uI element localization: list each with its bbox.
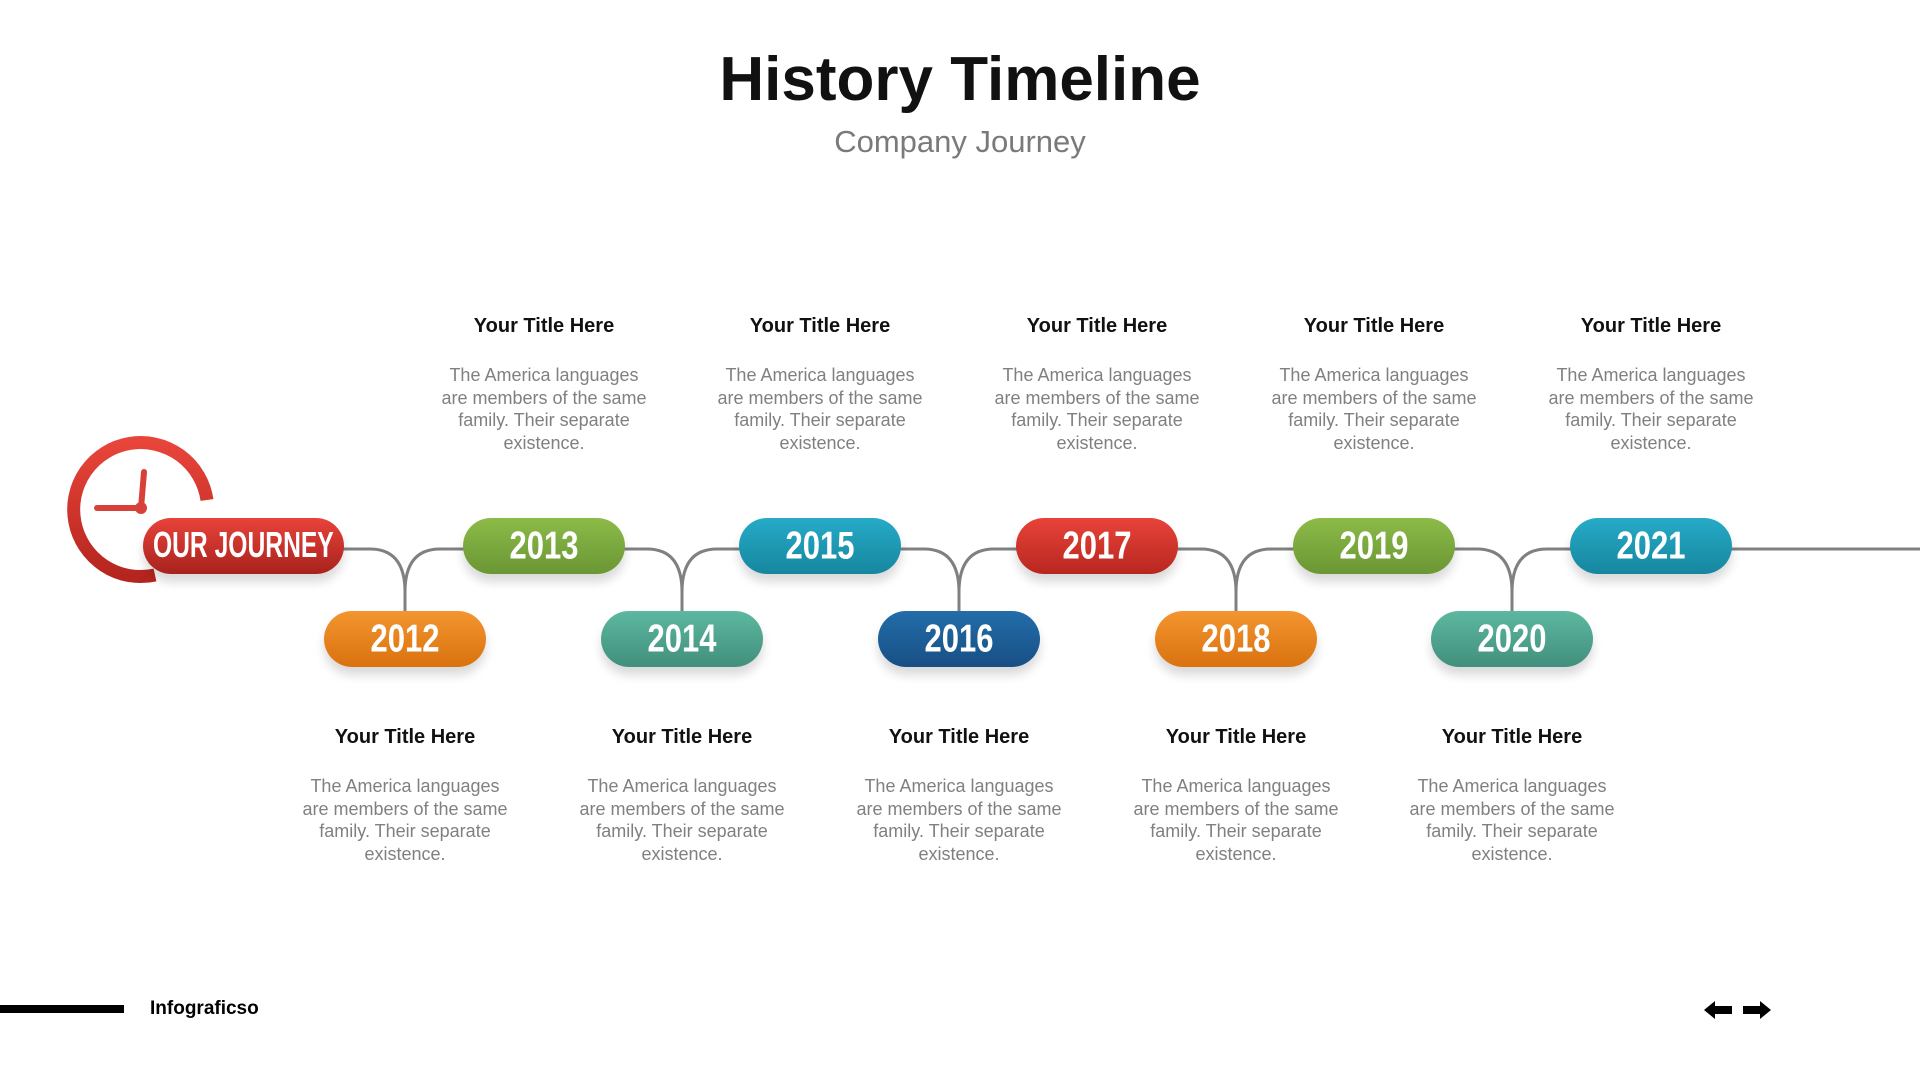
pill: 2018: 2018: [1202, 616, 1270, 660]
pill: 2012: [324, 611, 486, 667]
pill: 2019: [1293, 518, 1455, 574]
text: 2018: [1133, 726, 1339, 864]
text: 2019: Your Title Here: [1304, 315, 1444, 337]
pill: 2014: 2014: [648, 616, 716, 660]
text: 2017: Your Title Here: [1027, 315, 1167, 337]
text: 2015: Your Title Here: [750, 315, 890, 337]
text: 2021: [1548, 315, 1754, 452]
text: 2012: [302, 726, 508, 864]
icon: nav arrows: [1704, 1001, 1771, 1019]
pill: 2021: [1570, 518, 1732, 574]
text: 2017: [994, 315, 1200, 452]
text: 2018: Your Title Here: [1166, 726, 1306, 748]
pill: 2015: [739, 518, 901, 574]
text: 2015: [717, 315, 923, 452]
footer bar: [0, 1005, 124, 1013]
text: 2020: The America languages are members of the same family. Their separate existence.: [1409, 776, 1615, 864]
pill: 2018: [1155, 611, 1317, 667]
pill: 2016: 2016: [925, 616, 993, 660]
text: 2014: The America languages are members of the same family. Their separate existence.: [579, 776, 785, 864]
text: 2020: [1409, 726, 1615, 864]
text: 2021: Your Title Here: [1581, 315, 1721, 337]
text: 2015: The America languages are members of the same family. Their separate existence.: [717, 365, 923, 452]
text: 2013: The America languages are members of the same family. Their separate existence.: [441, 365, 647, 452]
text: 2014: [579, 726, 785, 864]
pill: 2016: [878, 611, 1040, 667]
pill: 2020: 2020: [1478, 616, 1546, 660]
text: 2019: The America languages are members of the same family. Their separate existence.: [1271, 365, 1477, 452]
pill: 2012: 2012: [371, 616, 439, 660]
text: 2016: [856, 726, 1062, 864]
pill: 2019: 2019: [1340, 524, 1408, 567]
title: History Timeline: [719, 45, 1201, 114]
text: 2021: The America languages are members of the same family. Their separate existence.: [1548, 365, 1754, 452]
pill: 2015: 2015: [786, 524, 854, 567]
pill: our journey: OUR JOURNEY: [153, 525, 334, 565]
text: 2016: Your Title Here: [889, 726, 1029, 748]
text: 2012: Your Title Here: [335, 726, 475, 748]
text: 2013: Your Title Here: [474, 315, 614, 337]
text: 2013: [441, 315, 647, 452]
pill: 2017: [1016, 518, 1178, 574]
pill: 2020: [1431, 611, 1593, 667]
pill: 2014: [601, 611, 763, 667]
pill: 2013: [463, 518, 625, 574]
text: 2014: Your Title Here: [612, 726, 752, 748]
text: 2020: Your Title Here: [1442, 726, 1582, 748]
subtitle: Company Journey: [834, 124, 1086, 159]
icon: clock: [67, 436, 214, 583]
pill: 2013: 2013: [510, 524, 578, 567]
pill: 2017: 2017: [1063, 524, 1131, 567]
text: 2019: [1271, 315, 1477, 452]
text: 2017: The America languages are members of the same family. Their separate existence.: [994, 365, 1200, 452]
text: 2018: The America languages are members of the same family. Their separate existence.: [1133, 776, 1339, 864]
footer brand: Infograficso: [150, 998, 259, 1019]
text: 2016: The America languages are members of the same family. Their separate existence.: [856, 776, 1062, 864]
text: 2012: The America languages are members of the same family. Their separate existence.: [302, 776, 508, 864]
pill: our journey: [143, 518, 344, 574]
pill: 2021: 2021: [1617, 524, 1685, 567]
